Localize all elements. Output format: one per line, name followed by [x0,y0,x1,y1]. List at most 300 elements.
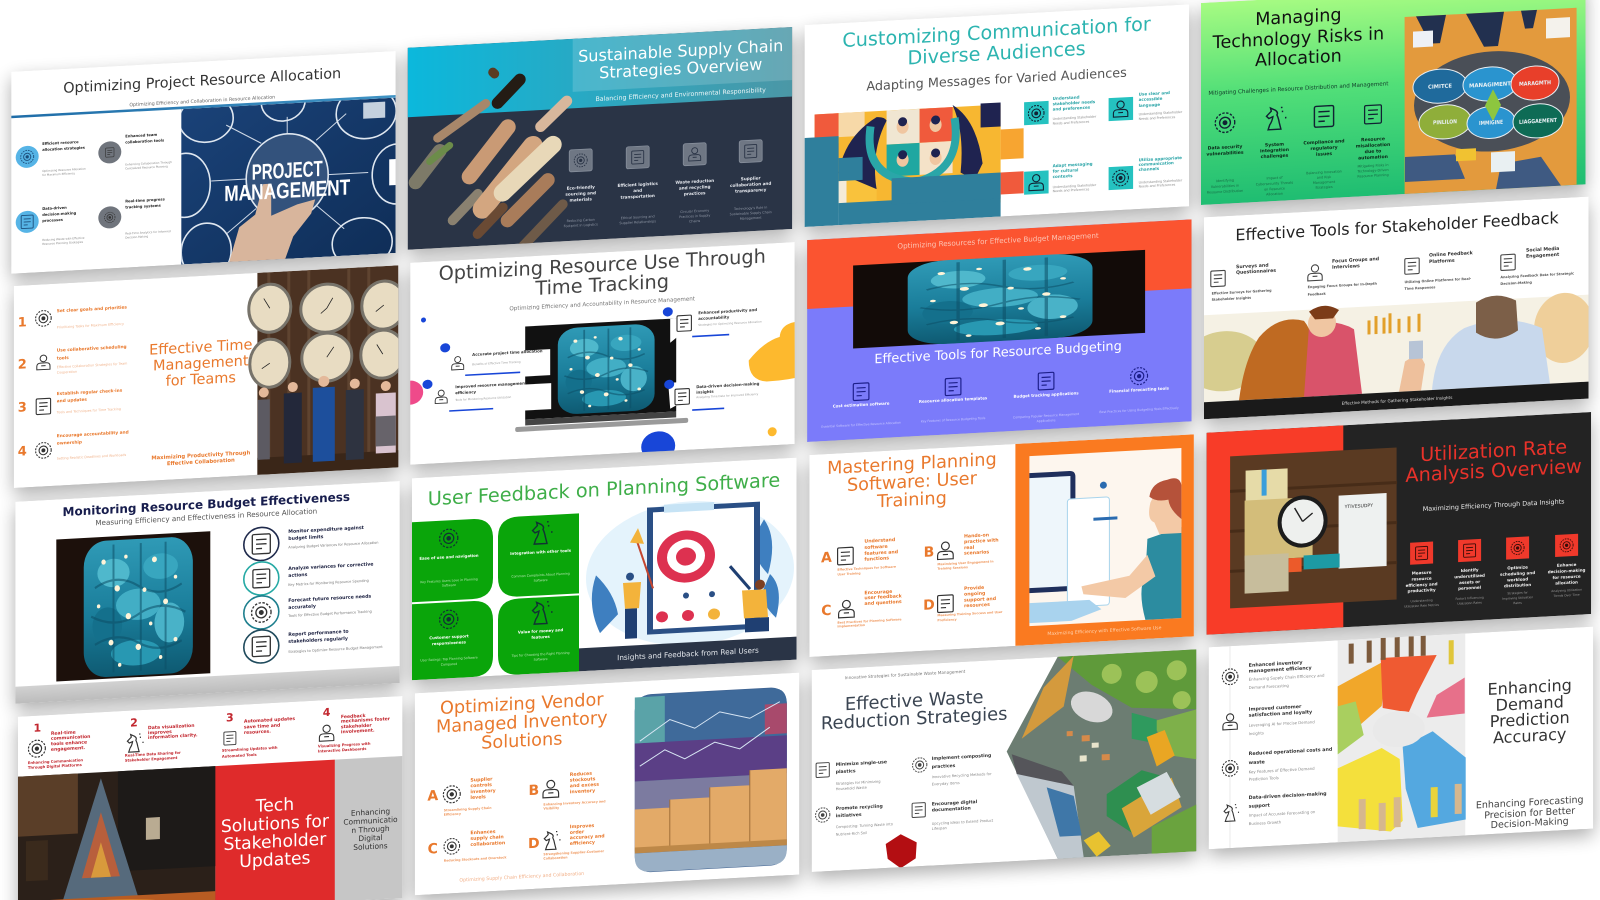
numbered steps: Encourage accountability and [57,430,129,439]
four risks: on Resource [1264,186,1285,192]
four risks: Strategies [1315,185,1333,190]
checklist: budget limits [288,534,324,542]
numbered updates: Automated Tools [222,753,258,759]
numbered updates: resources. [244,729,271,736]
heading: Monitoring Resource Budget Effectiveness [63,490,350,519]
heading: Management [153,353,249,375]
numbered steps: and updates [57,397,87,404]
items A to D: Efficiency [444,812,462,817]
photo: glass jars [853,250,1145,349]
items A to D: accuracy and [570,833,605,841]
four risks: misallocation [1356,142,1390,150]
four methods: Feedback [1308,292,1327,297]
four tools: Budget tracking applications [1014,390,1079,399]
checklist [244,521,383,664]
four risks: System [1265,143,1284,149]
panel: Tech Solutions for Stakeholder Updates [18,696,402,900]
title panel: Strategies Overview [599,55,762,82]
items A to D: C [821,603,832,619]
items A to D: Implementation [837,623,865,628]
photo strips: hands and soil [416,68,567,252]
numbered updates: 3 [226,711,234,724]
numbered updates: Stakeholder Engagement [125,756,178,763]
items [816,753,994,838]
items: Understanding Stakeholder [1053,115,1096,121]
gray subtitle panel: Digital [358,833,383,843]
items A to D: software [864,544,888,551]
four goals: workload [1507,576,1528,583]
heading: Allocation [1255,46,1342,71]
title panel [573,27,793,92]
four risks: Data security [1208,145,1242,152]
items A to D: Reduces [570,772,592,778]
items: initiatives [836,812,862,819]
photo: team around management diagram: PINLILON [1433,119,1457,127]
items A to D: support and [964,596,996,604]
items A to D: Proficiency [937,617,957,622]
checklist: Analyze variances for corrective [288,562,373,572]
items: Implement composting [932,754,991,762]
red hexagon [886,833,917,869]
panel: Enhancing Demand Prediction Accuracy [1209,627,1593,849]
four goals: Strategies for [1507,590,1528,596]
numbered updates: Enhancing Communication [28,758,83,765]
heading: Diverse Audiences [908,37,1086,69]
tagline: Maximizing Productivity Through [151,450,250,462]
four strategies: Circular Economy [680,208,709,214]
four tools: Comparing Popular Resource Management [1013,412,1079,420]
items A to D: Hands-on [964,533,989,540]
isometric waste-site illustration [1007,649,1197,862]
numbered updates: Streamlining Updates with [222,746,277,753]
items: four focus areas: decision-making [42,211,77,217]
watercolor illustration [1184,290,1594,403]
four goals: assets or [1459,579,1480,585]
items: four focus areas: Efficient resource [42,140,79,146]
items A to D: D [528,836,540,852]
four goals: Trends Over Time [1552,593,1580,598]
four goals [1404,533,1586,611]
four strategies: Supplier Relationships [619,219,656,225]
four risks: regulatory [1310,145,1338,152]
panel: Managing Technology Risks in Allocation [1201,0,1586,205]
four goals: allocation [1555,579,1578,586]
photo: alarm clock on desk: YTIVESUDPY [1344,503,1373,510]
panel: Monitoring Resource Budget Effectiveness [15,481,400,704]
numbered updates: Interactive Dashboards [318,747,367,754]
items: stakeholder needs [1053,99,1096,106]
numbered updates: Real-time [51,731,76,737]
checklist: Key Metrics for Monitoring Resource Spending [288,579,369,587]
footer tagline: Maximizing Efficiency with Effective Software Use [1047,625,1162,637]
items A to D: A [821,550,832,566]
four strategies: and recycling [679,184,711,191]
callouts: Data-driven decision-making [696,381,759,389]
items: four focus areas: Enhancing Collaboration Through [125,160,172,167]
heading: Managed Inventory [436,708,608,738]
numbered updates: 4 [323,706,331,719]
four benefits: satisfaction and loyalty [1249,709,1313,719]
four risks: due to [1365,148,1381,155]
four strategies: transparency [735,187,767,194]
items A to D: collaboration [470,840,505,848]
items A to D: user feedback [864,593,903,601]
callouts: efficiency [455,389,477,395]
four risks: Resource [1361,137,1385,143]
items A to D: scenarios [964,549,989,557]
items: four focus areas: processes [42,218,64,223]
gray subtitle panel: Enhancing [351,807,390,818]
footer band [15,666,400,704]
items: Utilize appropriate [1139,155,1182,162]
photo: team around management diagram: MARAGMTH [1519,80,1551,88]
four benefits: Business Growth [1249,819,1282,826]
four methods: Social Media [1526,247,1559,254]
numbered steps: tools [57,355,69,362]
four goals: Enhance [1557,562,1576,568]
items [1024,89,1183,195]
four strategies: Technology's Role in [734,205,767,211]
panel: Customizing Communication for Diverse Audiences [805,4,1189,227]
items A to D: functions [864,555,889,563]
items: Everyday Items [932,781,960,787]
red side panel [1207,425,1343,635]
four risks: Compliance and [1303,139,1345,146]
items A to D: Encourage [864,590,892,596]
callouts: insights [696,389,714,395]
callouts: accountability [698,314,730,321]
items: four focus areas: for Maximum Efficiency [42,171,75,177]
items: communication [1139,160,1174,167]
items A to D: Reducing Stockouts and Overstock [444,855,507,863]
numbered updates: Automated updates [244,717,295,725]
panel: Effective Tools for Resource Budgeting [807,219,1192,442]
photo: team around management diagram: CIMITCE [1428,83,1452,91]
four goals: Utilization Rate Metrics [1404,603,1439,609]
heading: for Teams [166,370,236,390]
items: four focus areas: Resource Planning Strategies [42,240,84,246]
items A to D: Improves [570,824,594,830]
items A to D: real [964,545,975,551]
four strategies: transportation [620,193,655,200]
four risks: Management [1313,180,1336,185]
panel: Utilization Rate Analysis Overview [1207,412,1591,635]
four risks: and Risk [1317,175,1331,180]
four tools: Best Practices for Using Budgeting Tools Effectively [1099,406,1179,414]
four benefits: Improved customer [1249,705,1301,713]
items A to D: and questions [864,599,902,607]
items: four focus areas: Data-driven [42,206,67,211]
laptop with jar photo [510,318,688,432]
four methods: Effective Surveys for Gathering [1212,288,1272,296]
heading: Time Tracking [534,270,669,300]
four tools: Cost estimation software [833,401,890,409]
heading: Analysis Overview [1405,455,1582,487]
four strategies: Reducing Carbon [567,218,595,223]
footer [1204,382,1588,419]
callouts: Accurate project time allocation [472,348,543,357]
panel: Sustainable Supply Chain Strategies Overview [408,27,793,253]
panel: Optimizing Project Resource Allocation [11,51,396,274]
illustration: target poster [586,496,794,651]
feedback tiles: Common Complaints About Planning [511,572,570,579]
items A to D: levels [470,794,486,801]
numbered steps: Set clear goals and priorities [57,304,127,314]
four strategies: Practices in Supply [679,213,710,219]
callouts: Improved resource management [455,380,527,389]
items A to D: Training Sessions [937,565,968,571]
four strategies: Waste reduction [675,178,714,185]
four goals: decision-making [1548,567,1586,574]
items A to D: D [923,597,935,614]
red title panel: Updates [239,848,311,872]
four goals: Utilization Rates [1457,600,1482,606]
items A to D: ongoing [964,591,985,598]
items A to D: stockouts [570,776,596,784]
heading: Utilization Rate [1420,435,1567,466]
decorative blobs [410,318,795,452]
orange side panel [1015,434,1194,646]
four tools: Financial forecasting tools [1109,385,1170,394]
items A to D: resources [964,602,990,609]
items: Use clear and [1139,90,1170,97]
items: and preferences [1053,105,1091,112]
subtitle: Maximizing Efficiency Through Data Insights [1423,497,1565,513]
red title panel: Solutions for [221,811,330,837]
items A to D: features and [864,549,898,557]
items A to D: efficiency [570,840,595,847]
four benefits: management efficiency [1249,665,1312,675]
four benefits: Prediction Tools [1249,775,1279,782]
items: four focus areas: Reducing Waste with Effective [42,236,84,242]
numbered updates: tools enhance [51,739,87,747]
four goals: Measure [1412,570,1431,576]
four methods: Stakeholder Insights [1212,296,1251,302]
subtitle: Mitigating Challenges in Resource Distribution and Management [1208,81,1389,97]
photo: segmented wheel with figures [1338,633,1466,842]
four methods: Questionnaires [1236,268,1276,276]
numbered updates: stakeholder [341,723,372,730]
four goals: resource [1412,576,1432,582]
four tools: Resource allocation templates [919,395,988,404]
four methods: Analyzing Feedback Data for Strategic [1500,271,1574,279]
four benefits [1222,658,1333,828]
four methods: Interviews [1332,263,1360,271]
four methods: Time Responses [1404,285,1435,291]
red title panel: Tech [256,795,294,817]
items A to D: Enhancing Inventory Accuracy and [543,799,606,807]
items: four focus areas: allocation strategies [42,146,86,152]
subtitle: Enhancing Forecasting [1476,795,1584,811]
heading: Enhancing [1488,675,1572,699]
checklist: Analyzing Budget Variances for Resource Allocation [288,541,379,550]
four goals: Analyzing Utilization [1551,588,1582,593]
items A to D: Best Practices for Planning Software [837,617,902,625]
items: channels [1139,166,1160,172]
feedback tiles: User Ratings: Top Planning Software [420,655,478,663]
heading: Optimizing Resource Use Through [439,245,766,285]
panel: Effective Waste Reduction Strategies [812,649,1197,873]
heading: Technology Risks in [1212,24,1384,53]
heading: Software: User [847,469,978,496]
numbered steps: 2 [18,357,27,373]
numbered updates: Real-Time Data Sharing for [125,751,181,758]
items: Adapt messaging [1053,161,1093,168]
heading: Reduction Strategies [821,703,1007,734]
timeline rule [1229,646,1231,848]
items: four focus areas: Optimizing Resource Allocation [42,167,86,173]
callouts: Enhanced productivity and [698,307,757,315]
heading: Effective Tools for Stakeholder Feedback [1235,208,1559,245]
items: Minimize single-use [836,760,887,768]
numbered steps: 4 [18,444,27,460]
gray subtitle panel: Solutions [353,841,388,852]
four benefits: support [1249,803,1270,810]
callouts: Benefits of Effective Time Tracking [472,360,521,366]
items: four focus areas: Decision-Making [125,234,148,240]
gray subtitle panel [335,756,402,900]
photo: pyramid in dark room [18,766,215,900]
items: Understanding Stakeholder [1139,178,1182,185]
items A to D: Measuring Training Success and User [937,610,1002,617]
items A to D: inventory [470,788,496,795]
footer: caption: Insights and Feedback from Real Users [617,646,759,662]
four goals: Understanding [1411,598,1433,603]
items: accessible [1139,96,1163,102]
numbered steps [18,304,129,463]
items: Understanding Stakeholder [1053,183,1096,189]
items: four focus areas: tracking systems [125,204,162,210]
red title panel: Stakeholder [223,830,327,855]
photo: glass jar [56,531,210,681]
four goals: Optimize [1507,564,1528,571]
items A to D [427,770,606,867]
four goals: Improving Utilization [1502,595,1533,601]
checklist: Strategies to Optimize Resource Budget Management [288,645,383,654]
photo: team around management diagram: LIAGGAEMENT [1519,118,1557,126]
numbered updates: Visualizing Progress with [318,742,370,749]
photo: clocks and team [249,265,406,475]
callouts: Strategies for Optimizing Resource Allocation [698,320,762,327]
items: four focus areas: collaboration tools [125,138,165,145]
four tools: Applications [1037,418,1056,423]
numbered steps: 1 [18,315,27,331]
panel: Effective Tools for Stakeholder Feedback [1184,196,1594,420]
four methods: Surveys and [1236,264,1269,270]
photo: project management: PROJECT [252,156,323,185]
footer: Effective Methods for Gathering Stakeholder Insights [1342,395,1452,406]
numbered steps: Effective Collaboration Strategies for Team [57,361,127,369]
items A to D: supply chain [470,834,504,842]
four strategies [564,139,772,230]
four strategies: Footprint in Logistics [564,222,598,228]
numbered steps: 3 [18,400,27,416]
items A to D: practice with [964,537,999,545]
items: for cultural [1053,167,1079,174]
items A to D: Collaboration [543,855,568,861]
four goals: Factors Influencing [1455,595,1484,601]
four risks: Resource Distribution [1207,189,1243,195]
subtitle: Decision-Making [1491,816,1569,831]
four methods: Platforms [1429,258,1455,265]
four strategies: practices [684,190,706,196]
illustration: mosaic of faces [805,101,1024,227]
four risks: Resource Planning [1357,173,1389,179]
subtitle: Adapting Messages for Varied Audiences [866,66,1127,95]
gray subtitle panel: n Through [351,824,390,835]
items A to D: User Training [837,571,861,576]
numbered updates: mechanisms foster [341,716,391,725]
numbered steps: Establish regular check-ins [57,389,122,397]
tagline: Innovative Strategies for Sustainable Waste Management [845,669,966,680]
items: Strategies for Minimizing [836,780,881,786]
four strategies: Supplier [741,175,761,181]
items: plastics [836,768,856,775]
four methods: Decision-Making [1500,280,1532,286]
four strategies: Efficient logistics [618,181,658,188]
subtitle: Optimizing Resources for Effective Budget Management [897,231,1099,251]
panel: Mastering Planning Software: User Training [809,434,1194,657]
items: Composting: Turning Waste into [836,822,893,829]
heading: Effective Waste [845,687,984,715]
feedback tiles: Customer support [429,633,469,640]
four risks: Impact of [1266,176,1283,180]
numbered updates: save time and [244,723,280,731]
items: contexts [1053,173,1073,179]
feedback tiles: responsiveness [432,639,467,646]
feedback tiles: Tips for Choosing the Right Planning [512,651,570,658]
numbered updates: Through Digital Platforms [28,763,83,770]
subtitle: Optimizing Efficiency and Accountability in Resource Management [509,296,696,312]
four methods: Engagement [1526,252,1560,260]
four strategies: materials [570,196,592,203]
numbered updates: 1 [33,721,41,735]
numbered updates: improves [148,729,172,736]
items: Household Waste [836,786,868,791]
items A to D: controls [470,782,492,789]
panel: Optimizing Resource Use Through Time Tracking [397,242,795,475]
feedback tiles: Integration with other tools [510,548,572,556]
checklist: stakeholders regularly [288,636,348,645]
four benefits: Demand Forecasting [1249,683,1289,690]
numbered steps: ownership [57,439,82,447]
four strategies: collaboration and [730,181,771,188]
items: language [1139,102,1160,108]
items A to D [821,531,1003,629]
four risks: Vulnerabilities in [1211,184,1239,189]
items: Understanding Stakeholder [1139,110,1182,116]
numbered updates: information clarity. [148,732,198,741]
four goals: distribution [1504,582,1531,588]
numbered updates: engagement. [51,745,85,753]
items: Needs and Preferences [1053,120,1090,126]
heading: Accuracy [1493,724,1567,747]
four benefits: Enhancing Supply Chain Efficiency and [1249,673,1324,682]
heading: Customizing Communication for [842,12,1151,52]
four methods [1211,245,1574,302]
heading: Optimizing Vendor [440,690,604,719]
numbered steps: Prioritizing Tasks for Maximum Efficiency [57,322,124,329]
items: four focus areas: Centralized Resource Planning [125,164,168,171]
photo: team around management diagram: MANAGIMENT [1469,81,1511,90]
four risks: integration [1260,147,1289,155]
four goals: for resource [1553,574,1581,580]
items: Needs and Preferences [1053,187,1090,193]
items: four focus areas: Real-time progress [125,197,165,204]
callouts [422,307,762,412]
items: Upcycling Ideas to Extend Product [932,819,993,826]
subtitle: Measuring Efficiency and Effectiveness in Resource Allocation [95,506,317,527]
